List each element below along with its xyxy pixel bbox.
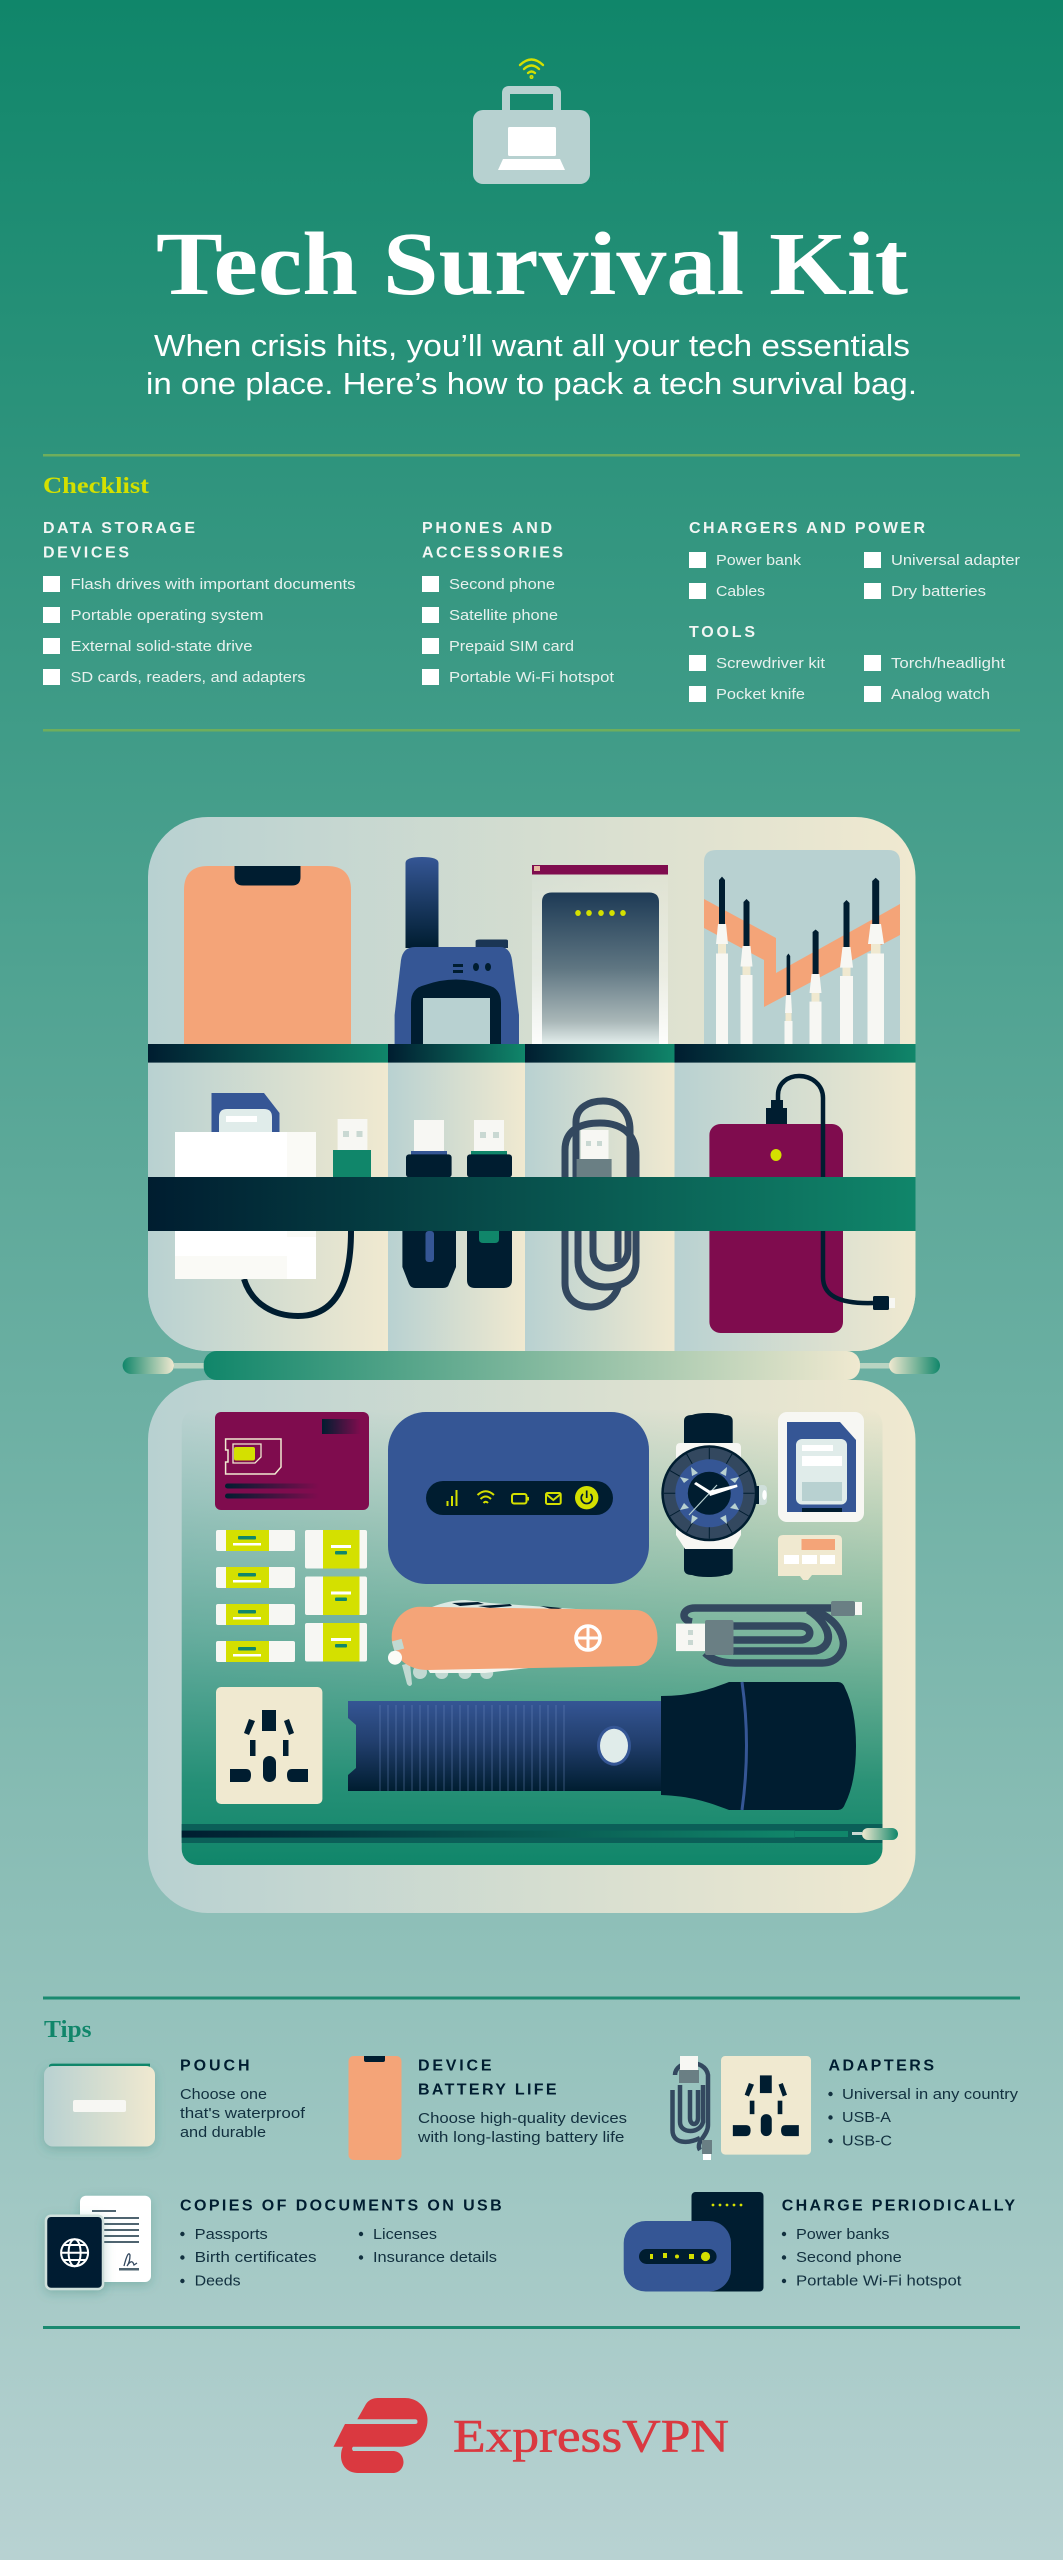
subtitle bbox=[146, 328, 917, 401]
icon: coiled USB cable bbox=[565, 1101, 636, 1307]
shelf band with four segments bbox=[148, 1044, 916, 1063]
pouch zipper bbox=[182, 1824, 898, 1843]
tip: adapters: ADAPTERS bbox=[828, 2058, 934, 2075]
tip: copies of documents on USB: Licenses bbox=[373, 2226, 437, 2243]
checklist: phones and accessories bbox=[422, 520, 615, 686]
icon: SD card bbox=[778, 1412, 864, 1522]
tip: pouch: that's waterproof bbox=[180, 2105, 306, 2122]
icon: solid-state drive with SD card and cable bbox=[175, 1093, 351, 1316]
panel: upper bag compartment bbox=[148, 817, 916, 1351]
icon: document and passport bbox=[46, 2196, 151, 2289]
icon: phone bbox=[348, 2056, 402, 2160]
tip: device battery life: BATTERY LIFE bbox=[418, 2082, 557, 2099]
tip: pouch: and durable bbox=[180, 2124, 266, 2141]
icon: torch bbox=[348, 1682, 856, 1810]
icon: portable Wi-Fi hotspot bbox=[388, 1412, 649, 1584]
checklist: data storage devices bbox=[43, 520, 356, 686]
checklist: chargers and power: Cables bbox=[716, 583, 765, 600]
tip: adapters bbox=[672, 2056, 1019, 2160]
tip: copies of documents on USB: Passports bbox=[195, 2226, 268, 2243]
tip: charge periodically: Power banks bbox=[796, 2226, 890, 2243]
logo: ExpressVPN bbox=[334, 2398, 729, 2473]
title: Tech Survival Kit bbox=[156, 215, 908, 314]
checklist: data storage devices: External solid-state drive bbox=[70, 638, 252, 655]
checklist heading: Checklist bbox=[43, 473, 149, 498]
checklist: phones and accessories: Portable Wi-Fi hotspot bbox=[449, 669, 615, 686]
icon: universal adapter bbox=[216, 1687, 322, 1804]
tip: copies of documents on USB bbox=[46, 2196, 502, 2290]
tip: device battery life bbox=[348, 2056, 627, 2160]
icon: power bank and hotspot bbox=[624, 2192, 764, 2292]
checklist: tools bbox=[689, 624, 1006, 703]
wide elastic strap bbox=[148, 1177, 916, 1231]
tips heading: Tips bbox=[44, 2017, 92, 2043]
checklist: tools: TOOLS bbox=[689, 624, 755, 641]
subtitle: in one place. Here’s how to pack a tech survival bag. bbox=[146, 366, 917, 401]
icon: wifi signal bbox=[520, 60, 543, 78]
tip: copies of documents on USB: Birth certificates bbox=[195, 2249, 317, 2266]
checklist: chargers and power: Universal adapter bbox=[891, 552, 1020, 569]
checklist: chargers and power: Power bank bbox=[716, 552, 802, 569]
checklist: data storage devices: DEVICES bbox=[43, 544, 129, 562]
icon: pouch bbox=[44, 2064, 155, 2146]
checklist: tools: Analog watch bbox=[891, 686, 990, 703]
icon: screwdriver kit bbox=[704, 850, 900, 1044]
icon: pocket knife bbox=[388, 1600, 658, 1686]
icon: wrapped power bank bbox=[532, 865, 668, 1044]
tip: adapters: USB-A bbox=[842, 2109, 891, 2126]
tip: pouch: Choose one bbox=[180, 2086, 267, 2103]
tip: device battery life: with long-lasting battery life bbox=[417, 2129, 624, 2146]
tip: copies of documents on USB: COPIES OF DOCUMENTS ON USB bbox=[180, 2198, 502, 2214]
checklist: data storage devices: Portable operating system bbox=[70, 607, 264, 624]
checklist: data storage devices: SD cards, readers, and adapters bbox=[70, 669, 306, 686]
icon: laptop bag bbox=[473, 90, 590, 184]
icon: second phone bbox=[184, 866, 351, 1044]
tip: charge periodically: Second phone bbox=[796, 2249, 902, 2266]
tip: adapters: USB-C bbox=[842, 2132, 892, 2149]
checklist: phones and accessories: Prepaid SIM card bbox=[449, 638, 574, 655]
zipper hinge bbox=[123, 1351, 940, 1380]
icon: large dry batteries bbox=[305, 1530, 367, 1662]
tip: charge periodically: CHARGE PERIODICALLY bbox=[782, 2198, 1015, 2214]
checklist: data storage devices: DATA STORAGE bbox=[43, 520, 195, 537]
icon: power bank with cable bbox=[709, 1076, 895, 1333]
checklist: phones and accessories: Second phone bbox=[449, 576, 555, 593]
checklist: phones and accessories: PHONES AND bbox=[422, 520, 552, 537]
logo: ExpressVPN: ExpressVPN bbox=[453, 2411, 729, 2463]
subtitle: When crisis hits, you’ll want all your tech essentials bbox=[154, 328, 910, 363]
checklist: phones and accessories: ACCESSORIES bbox=[422, 544, 563, 562]
icon: bundled USB cable bbox=[676, 1601, 862, 1663]
tip: copies of documents on USB: Insurance details bbox=[373, 2249, 497, 2266]
checklist: tools: Screwdriver kit bbox=[716, 655, 826, 672]
checklist: tools: Torch/headlight bbox=[891, 655, 1006, 672]
checklist: tools: Pocket knife bbox=[716, 686, 805, 703]
icon: USB plug on coiled cable bbox=[577, 1130, 612, 1177]
icon: micro SD card bbox=[778, 1535, 842, 1580]
checklist: chargers and power: CHARGERS AND POWER bbox=[689, 520, 925, 537]
icon: flash drive with blue accent bbox=[402, 1120, 456, 1288]
icon: cable bbox=[672, 2056, 712, 2160]
panel: lower bag compartment bbox=[148, 1380, 916, 1913]
icon: satellite phone bbox=[395, 857, 519, 1044]
checklist: data storage devices: Flash drives with important documents bbox=[70, 576, 356, 593]
icon: flash drive with green accent bbox=[467, 1120, 512, 1288]
icon: USB drive connector bbox=[333, 1119, 371, 1177]
tip: device battery life: Choose high-quality devices bbox=[418, 2110, 627, 2127]
icon: SIM card bbox=[215, 1412, 369, 1510]
checklist: chargers and power bbox=[689, 520, 1020, 600]
tip: device battery life: DEVICE bbox=[418, 2058, 492, 2075]
icon: adapter bbox=[721, 2056, 811, 2155]
tip: pouch: POUCH bbox=[180, 2058, 250, 2075]
tip: pouch bbox=[44, 2058, 306, 2146]
checklist: phones and accessories: Satellite phone bbox=[449, 607, 558, 624]
tip: adapters: Universal in any country bbox=[842, 2086, 1019, 2103]
icon: analog watch bbox=[661, 1413, 767, 1577]
tip: copies of documents on USB: Deeds bbox=[195, 2273, 241, 2290]
tip: charge periodically bbox=[624, 2192, 1015, 2292]
checklist: chargers and power: Dry batteries bbox=[891, 583, 986, 600]
tip: charge periodically: Portable Wi-Fi hotspot bbox=[796, 2273, 962, 2290]
icon: horizontal dry batteries bbox=[216, 1530, 295, 1662]
